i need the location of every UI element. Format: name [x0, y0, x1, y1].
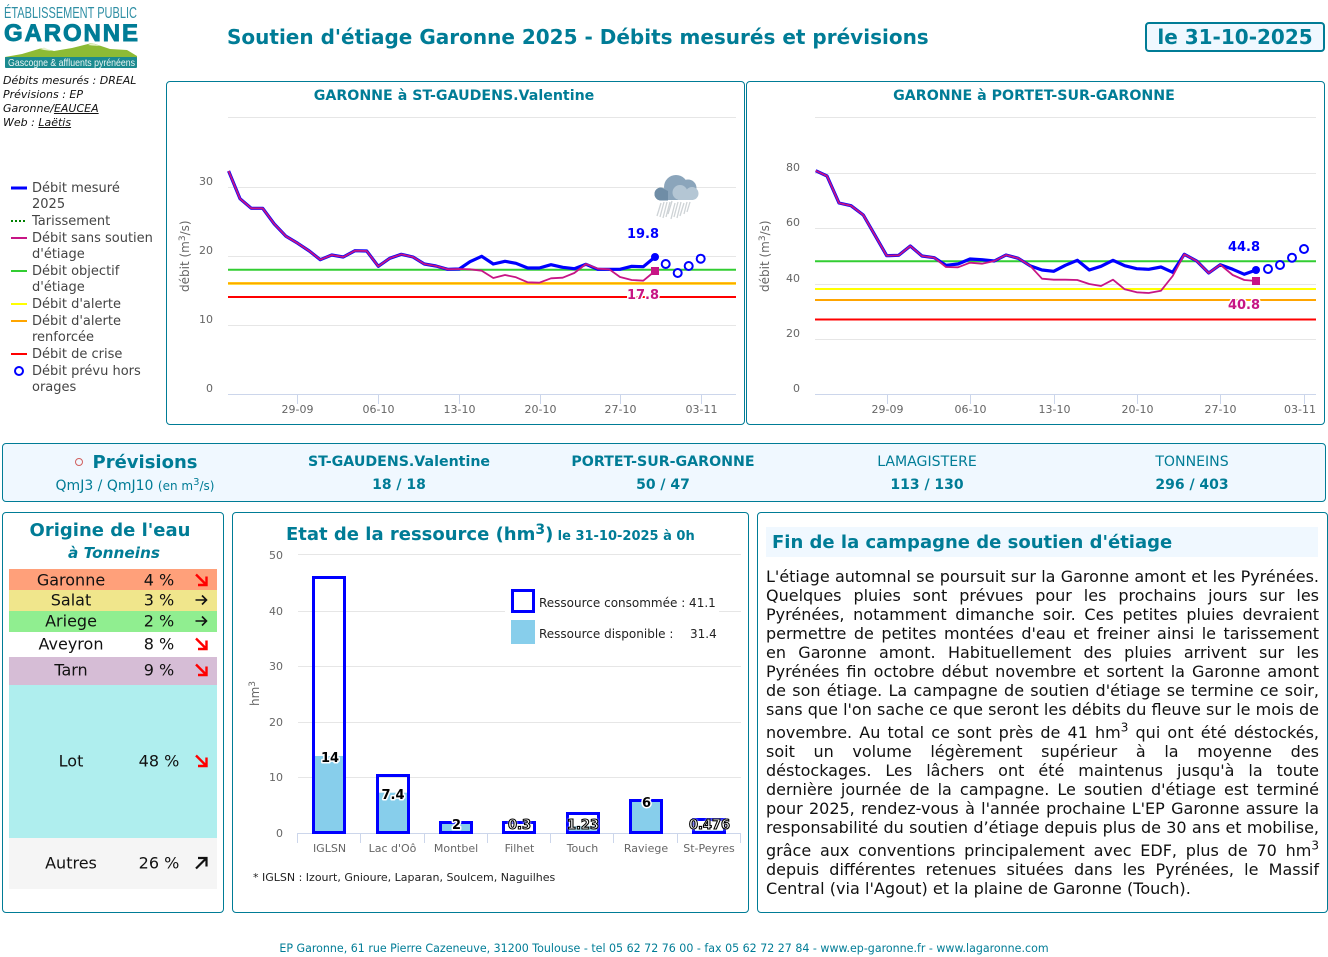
panel: chart Portet-sur-Garonne: 03-11 — [1284, 403, 1316, 416]
panel: chart Portet-sur-Garonne — [746, 81, 1325, 425]
forecasts heading: Prévisions — [93, 452, 197, 473]
commentary text: L'étiage automnal se poursuit sur la Garonne amont et les Pyrénées. — [766, 567, 1319, 586]
commentary heading: Fin de la campagne de soutien d'étiage — [772, 532, 1172, 553]
row: Aveyron — [38, 634, 208, 654]
row: Lot: 48 % — [139, 752, 179, 770]
row: Ariege: 2 % — [144, 612, 174, 630]
panel: chart Saint-Gaudens: 20-10 — [525, 403, 556, 416]
panel: chart Saint-Gaudens: 10 — [199, 313, 213, 326]
forecast: Saint-Gaudens: ST-GAUDENS.Valentine — [308, 454, 490, 470]
row: Salat — [9, 590, 217, 611]
footer: EP Garonne, 61 rue Pierre Cazeneuve, 31200 Toulouse - tel 05 62 72 76 00 - fax 05 62 72 27 84 - www.ep-garonne.fr - www.lagaronne.com — [279, 942, 1049, 955]
row: Garonne: 4 % — [144, 570, 174, 589]
title: Soutien d'étiage Garonne 2025 - Débits mesurés et prévisions — [227, 25, 929, 49]
forecast: Lamagistère — [877, 454, 977, 492]
panel: chart Portet-sur-Garonne: 20-10 — [1122, 403, 1153, 416]
reservoir heading: le 31-10-2025 à 0h — [558, 529, 695, 544]
legend: chart series: Débit sans soutien — [32, 230, 153, 246]
commentary text: dernière journée de la campagne. Le soutien d'étiage est terminé — [766, 780, 1319, 799]
panel: reservoir status: 6 — [642, 796, 651, 811]
legend: chart series: Débit objectif — [32, 264, 119, 278]
legend: reservoirs: 31.4 — [690, 627, 717, 641]
commentary text: depuis différentes retenues situées dans les Pyrénées, le Massif — [766, 860, 1319, 879]
forecast: Portet: 50 / 47 — [636, 476, 690, 492]
commentary text — [766, 567, 1320, 898]
date badge: le 31-10-2025 — [1157, 25, 1313, 49]
row: Aveyron: 8 % — [144, 634, 174, 654]
legend: chart series: d'étiage — [32, 247, 85, 262]
forecasts unit: QmJ3 / QmJ10 (en m3/s) — [56, 477, 214, 494]
legend: chart series: Débit prévu hors — [32, 364, 141, 378]
legend: chart series: Débit de crise — [32, 346, 122, 362]
chart heading: GARONNE à PORTET-SUR-GARONNE — [893, 88, 1175, 104]
panel: chart Saint-Gaudens: /s) — [178, 220, 192, 235]
commentary text: de son étiage. La campagne de soutien d'étiage se termine ce soir, — [766, 681, 1319, 700]
row: Tarn: Tarn — [54, 660, 88, 679]
row: Lot: Lot — [59, 752, 83, 770]
row: Ariege — [9, 611, 217, 632]
panel: chart Portet-sur-Garonne: 44.8 — [1228, 240, 1260, 255]
panel: reservoir status: Raviege — [624, 842, 668, 855]
forecast: Tonneins: 296 / 403 — [1155, 476, 1229, 492]
legend: chart series: Tarissement — [32, 214, 110, 228]
legend: chart series: orages — [32, 380, 76, 395]
legend: chart series: 2025 — [32, 197, 65, 212]
panel: reservoir status: 50 — [269, 549, 283, 562]
panel: reservoir status: Montbel — [434, 842, 478, 855]
panel: reservoir status: 0 — [276, 827, 283, 840]
commentary text: permettre de petites montées d'eau et freiner ainsi le tarissement — [766, 624, 1319, 643]
sources note: Garonne/EAUCEA — [3, 102, 99, 115]
row: Lot — [9, 685, 217, 838]
panel: reservoir status: 7.4 — [381, 788, 405, 803]
panel: forecasts — [2, 443, 1326, 502]
commentary text: novembre. Au total ce sont près de 41 hm3 qui ont été déstockés, — [766, 721, 1319, 742]
panel: reservoir status: 0.3 — [508, 818, 531, 833]
commentary heading — [766, 527, 1318, 557]
commentary text: pour 2025, rendez-vous à l'année prochaine L'EP Garonne assure la — [766, 799, 1319, 818]
panel: chart Saint-Gaudens: 30 — [199, 175, 213, 188]
reservoir heading: 3 — [535, 522, 545, 538]
legend: reservoirs — [505, 585, 719, 650]
panel: chart Portet-sur-Garonne: 06-10 — [955, 403, 986, 416]
panel: chart Saint-Gaudens: débit (m — [178, 241, 192, 292]
commentary text: responsabilité du soutien d’étiage depuis plus de 30 ans et mobilise, — [766, 818, 1319, 837]
panel: reservoir status: 14 — [321, 751, 339, 766]
legend: reservoirs: Ressource disponible : — [539, 627, 673, 641]
panel: chart Saint-Gaudens: 06-10 — [363, 403, 394, 416]
legend: chart series: Débit d'alerte — [32, 296, 121, 312]
panel: reservoir status: 20 — [269, 716, 283, 729]
panel: chart Portet-sur-Garonne: 13-10 — [1039, 403, 1070, 416]
reservoir heading: ) — [545, 524, 553, 545]
panel: reservoir status: hm — [248, 687, 262, 706]
panel: chart Saint-Gaudens: 27-10 — [605, 403, 636, 416]
panel: water origin — [2, 512, 224, 913]
panel: chart Saint-Gaudens: 3 — [178, 235, 188, 241]
panel: chart Portet-sur-Garonne: débit (m — [758, 241, 772, 292]
logo: Établissement public Garonne: Gascogne & affluents pyrénéens — [8, 57, 135, 69]
logo: Établissement public Garonne: GARONNE — [4, 20, 138, 47]
panel: chart Saint-Gaudens: 13-10 — [444, 403, 475, 416]
panel: chart Saint-Gaudens: 17.8 — [627, 288, 659, 303]
panel: chart Saint-Gaudens: 29-09 — [282, 403, 313, 416]
panel: chart Saint-Gaudens: 0 — [206, 382, 213, 395]
panel: chart Portet-sur-Garonne: /s) — [758, 220, 772, 235]
row: Garonne — [9, 569, 217, 591]
panel: reservoir status: 2 — [452, 818, 461, 833]
forecast: Portet: PORTET-SUR-GARONNE — [571, 454, 755, 470]
panel: reservoir status — [232, 512, 749, 913]
panel: chart Saint-Gaudens: 20 — [199, 244, 213, 257]
forecast: Saint-Gaudens: 18 / 18 — [372, 476, 426, 492]
commentary text: Quelques pluies sont prévues pour les prochains jours sur les — [766, 586, 1319, 605]
commentary text: en Garonne amont. Habituellement des pluies arrivent sur les — [766, 643, 1319, 662]
commentary text: sans que l'on sache ce que seront les débits du fleuve sur le mois de — [766, 700, 1319, 719]
icon: rain cloud — [654, 175, 698, 219]
panel: reservoir status: 10 — [269, 771, 283, 784]
logo: Établissement public Garonne: ÉTABLISSEMENT PUBLIC — [4, 3, 137, 22]
commentary text: Central (via l'Agout) et la plaine de Garonne (Touch). — [766, 879, 1191, 898]
logo: Établissement public Garonne — [4, 3, 138, 69]
forecast: Lamagistère: LAMAGISTERE — [877, 454, 977, 470]
forecast: Lamagistère: 113 / 130 — [890, 476, 964, 492]
sources note: Débits mesurés : DREAL — [3, 74, 136, 87]
panel: reservoir status: 30 — [269, 660, 283, 673]
panel: reservoir status: 0.476 — [689, 818, 730, 833]
commentary text: Pyrénées, notamment dimanche soir. Ces petites pluies devraient — [766, 605, 1319, 624]
panel: chart Portet-sur-Garonne: 40 — [786, 272, 800, 285]
row: Autres: Autres — [45, 854, 97, 872]
panel: chart Portet-sur-Garonne: 3 — [758, 235, 768, 241]
panel: reservoir status: 40 — [269, 605, 283, 618]
panel: reservoir status: St-Peyres — [683, 842, 735, 855]
panel: chart Portet-sur-Garonne: 40.8 — [1228, 298, 1260, 313]
sources note: Prévisions : EP — [3, 88, 83, 101]
commentary text: grâce aux conventions principalement avec EDF, plus de 70 hm3 — [766, 839, 1319, 860]
row: Tarn — [9, 657, 217, 685]
panel: chart Saint-Gaudens: 19.8 — [627, 227, 659, 242]
commentary text: Pyrénées fin octobre début novembre et sortent la Garonne amont — [766, 662, 1319, 681]
panel: reservoir status: Filhet — [505, 842, 535, 855]
row: Salat: 3 % — [144, 590, 174, 610]
panel: chart Portet-sur-Garonne: 20 — [786, 327, 800, 340]
water origin subheading: à Tonneins — [68, 544, 160, 562]
forecast: Tonneins: TONNEINS — [1155, 454, 1229, 470]
water origin heading: Origine de l'eau — [30, 520, 190, 541]
legend: chart series: Débit mesuré — [32, 180, 120, 196]
chart heading: GARONNE à ST-GAUDENS.Valentine — [314, 88, 594, 104]
legend: chart series: d'étiage — [32, 280, 85, 295]
row: Garonne: Garonne — [37, 570, 105, 589]
legend: chart series: renforcée — [32, 330, 94, 345]
panel: reservoir status: Lac d'Oô — [369, 842, 417, 855]
sources note — [3, 74, 136, 129]
legend: chart series — [11, 180, 153, 395]
panel: chart Saint-Gaudens: 03-11 — [686, 403, 717, 416]
panel: reservoir status: 1.23 — [567, 818, 599, 833]
forecast: Saint-Gaudens — [308, 454, 490, 492]
row: Ariege: Ariege — [45, 612, 97, 630]
reservoir heading: Etat de la ressource (hm — [286, 524, 535, 545]
panel: campaign commentary — [757, 512, 1328, 913]
forecast: Tonneins — [1155, 454, 1229, 492]
footnote: * IGLSN : Izourt, Gnioure, Laparan, Soulcem, Naguilhes — [253, 871, 556, 884]
row: Tarn: 9 % — [144, 660, 174, 679]
bars — [313, 756, 725, 833]
panel: chart Portet-sur-Garonne: 0 — [793, 382, 800, 395]
commentary text: déstockages. Les lâchers ont été maintenus jusqu'à la toute — [766, 761, 1319, 780]
panel: chart Portet-sur-Garonne: 60 — [786, 216, 800, 229]
row: Aveyron: Aveyron — [39, 634, 103, 654]
legend: reservoirs: Ressource consommée : 41.1 — [539, 596, 716, 610]
panel: chart Portet-sur-Garonne: 29-09 — [872, 403, 903, 416]
panel: chart Portet-sur-Garonne: 80 — [786, 161, 800, 174]
forecast: Portet — [571, 454, 755, 492]
date badge — [1145, 22, 1325, 52]
row: Salat: Salat — [51, 590, 91, 610]
row: Autres — [9, 838, 217, 889]
panel: chart Portet-sur-Garonne: 27-10 — [1205, 403, 1236, 416]
panel: reservoir status: 3 — [248, 681, 258, 687]
panel: reservoir status: Touch — [566, 842, 598, 855]
sources note: Web : Laëtis — [3, 116, 71, 129]
panel: chart Saint-Gaudens — [166, 81, 745, 425]
legend: chart series: Débit d'alerte — [32, 314, 121, 328]
panel: reservoir status: IGLSN — [313, 842, 346, 855]
row: Autres: 26 % — [139, 854, 179, 872]
commentary text: soit un volume légèrement supérieur à la moyenne des — [766, 742, 1319, 761]
